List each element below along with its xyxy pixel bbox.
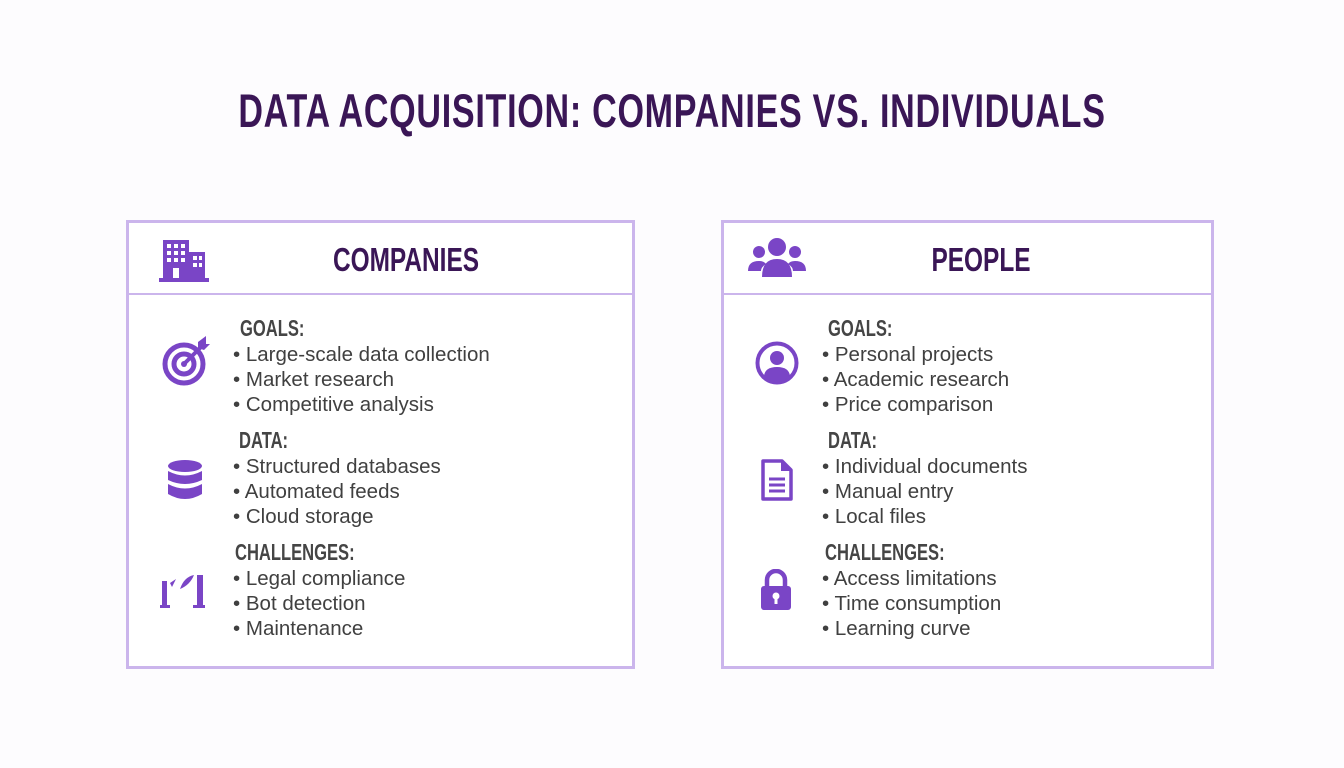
panel: people: • Access limitations: [822, 567, 997, 590]
icon: user circle: [756, 342, 798, 384]
companies header: [129, 223, 632, 295]
icon: padlock: [761, 569, 791, 610]
icon: challenges glyph: [160, 575, 205, 608]
panel: people: • Learning curve: [822, 617, 970, 640]
panel: companies: • Legal compliance: [233, 567, 405, 590]
panel: people: • Manual entry: [822, 480, 953, 503]
panel: people: • Local files: [822, 505, 926, 528]
panel: people: • Price comparison: [822, 393, 993, 416]
icon: database: [168, 460, 202, 499]
panel: companies: • Competitive analysis: [233, 393, 434, 416]
panel: companies: • Cloud storage: [233, 505, 374, 528]
icon: target: [162, 336, 210, 386]
panel: people: • Individual documents: [822, 455, 1027, 478]
panel: companies: • Market research: [233, 368, 394, 391]
people header: [724, 223, 1211, 295]
panel: companies: • Automated feeds: [233, 480, 400, 503]
panel: companies: • Maintenance: [233, 617, 363, 640]
challenges section: CHALLENGES:: [235, 539, 355, 565]
panel: companies: • Large-scale data collection: [233, 343, 490, 366]
panel: people: • Academic research: [822, 368, 1009, 391]
heading: companies: COMPANIES: [333, 241, 479, 278]
challenges section: CHALLENGES:: [825, 539, 945, 565]
icon: group of people: [748, 238, 806, 277]
heading: people: PEOPLE: [931, 241, 1031, 278]
panel: people: • Personal projects: [822, 343, 993, 366]
icon: building: [159, 240, 209, 282]
panel: people: • Time consumption: [822, 592, 1001, 615]
goals section: GOALS:: [240, 315, 304, 341]
panel: companies: • Bot detection: [233, 592, 366, 615]
icon: document: [761, 459, 793, 501]
data section: DATA:: [828, 427, 877, 453]
panel: companies: [126, 220, 635, 669]
panel: people: [721, 220, 1214, 669]
panel: companies: • Structured databases: [233, 455, 441, 478]
data section: DATA:: [239, 427, 288, 453]
title: DATA ACQUISITION: COMPANIES VS. INDIVIDUALS: [238, 84, 1106, 137]
goals section: GOALS:: [828, 315, 892, 341]
